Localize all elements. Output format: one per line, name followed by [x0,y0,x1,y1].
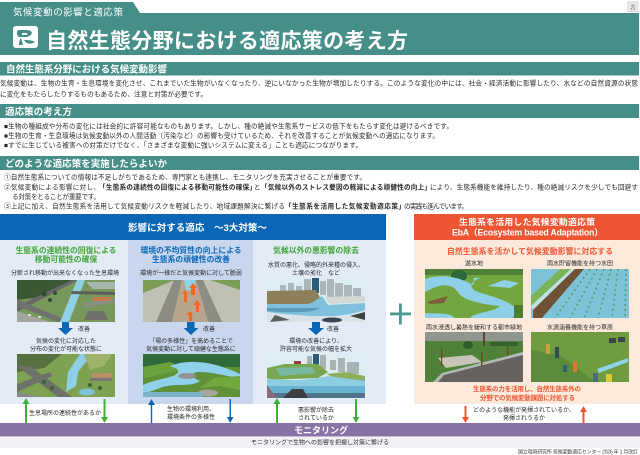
illustration: flood basin [425,260,523,318]
main title: 自然生態分野における適応策の考え方 [46,29,408,53]
arrows and monitoring questions: 環境条件の多様性 [167,413,215,421]
question: environment: 生物の環境利用、 [167,405,215,413]
description before: 分断され移動が出来なくなった生息環境 [11,269,119,277]
question: connectivity: 生息場所の連続性があるか [29,409,101,417]
arrow: blue up [148,399,155,423]
illustration: fragmented land [17,280,115,322]
illustration: flood basin: 遊水地 [465,260,483,268]
illustration: uniform channel [143,280,240,322]
panel header: 生態系を活用した気候変動適応策 [459,216,595,227]
arrow: red up [580,406,587,423]
section heading: どのような適応策を実施したらよいか [5,158,167,170]
panel: EbA [414,214,640,404]
text block: what to implement [4,172,638,210]
arrow: green down [352,399,360,423]
section: adaptation approach [0,104,639,118]
arrows and monitoring questions: 発揮されうるか [503,414,545,422]
column heading: 生態系の連続性の回復による [15,245,117,255]
arrow: blue down [227,399,234,423]
arrow: improve: 改善 [78,325,90,333]
description after: 環境の改善により、 [289,337,343,345]
text block: what to implement: と [254,184,261,192]
section heading: 適応策の考え方 [5,106,72,118]
illustration: rice paddy: 雨水貯留機能を持つ水田 [547,260,613,268]
column: other stressors [254,240,386,404]
description after: 気候の変化に対応した [36,337,96,345]
panel: EbA: 分野での気候変動課題に対処する [480,393,575,402]
column: connectivity: 移動可能性の確保 [35,254,97,264]
arrow: green down [101,399,108,423]
arrows and monitoring questions: されているか [298,415,334,422]
text block: what to implement: 「気候以外のストレス要因の軽減による頑健性の向上」 [261,182,431,192]
text block: what to implement: ③上記に加え、自然生態系を活用して気候変動リスクを軽減したり、地域課題解決に繋げる [4,202,285,210]
text block: climate impacts: に変化をもたらしたりするものもあるため、注意と対策が必要です。 [0,90,207,98]
illustration: grassland: 水源涵養機能を持つ草原 [547,324,613,332]
header band [0,2,639,55]
text block: climate impacts [0,78,638,98]
arrow: green up [22,398,30,423]
illustration: rice paddy [531,260,629,318]
arrow: red down [462,406,469,423]
column: heterogeneity: 気候変動に対して頑健な生態系に [146,345,236,353]
panel footer text: 生態系の力を活用し、自然生態系外の [473,384,582,393]
arrow: improve [308,322,339,335]
tag: front page mark: 表 [630,2,637,12]
monitoring description [0,437,640,448]
illustration: urban green [425,324,523,382]
text block: what to implement: の実践も進んでいます。 [404,202,468,210]
icon: nature logo [13,26,38,48]
panel header [414,214,640,240]
column: connectivity: 分布の変化が可能な状態に [30,345,102,353]
text block: what to implement: る対策をとることが重要です。 [12,192,100,201]
illustration: restored connectivity [17,354,115,397]
section heading: 自然生態系分野における気候変動影響 [6,64,167,76]
illustration: urban green: 雨水浸透し暑熱を緩和する都市緑地 [426,324,522,332]
section: climate impacts [0,62,639,76]
text block: adaptation approach: ■生物の生育・生息環境は気候変動以外の人間活動（汚染など）の影響も受けているため、それを改善することが気候変動への適応になります。 [4,131,439,140]
panel subheading: 自然生態系を活かして気候変動影響に対応する [447,246,613,256]
description after: 「場の多様性」を高めることで [149,337,233,345]
column: heterogeneity [128,240,254,404]
text block: adaptation approach: ■生物の種組成や分布の変化には社会的に許容可能なものもあります。しかし、種の絶滅や生態系サービスの低下をもたらす変化は避けるべきです。 [4,122,453,130]
text block: what to implement: ②気候変動による影響に対し、 [4,182,100,192]
column heading: 環境の不均質性の向上による [140,245,242,255]
arrow: improve [58,322,90,335]
text block: what to implement: 「生態系を活用した気候変動適応策」 [285,202,405,210]
text block: what to implement: 「生態系の連続性の回復による移動可能性の確保」 [99,182,256,192]
column heading: 気候以外の悪影響の除去 [273,245,359,255]
column: other stressors: 土壌の劣化 など [292,269,340,277]
illustration: restored waterfront [267,353,365,398]
panel header [0,214,386,240]
monitoring band [0,423,640,436]
text block: adaptation approach [4,122,453,150]
description before: 環境が一様だと気候変動に対して脆弱 [140,269,242,277]
text block: what to implement: により、生態系機能を維持したり、種の絶滅リスクを少しでも回避す [430,182,638,192]
header category label: 気候変動の影響と適応策 [13,6,123,18]
text block: climate impacts: 気候変動は、生物の生育・生息環境を変化させ、これまでいた生物がいなくなったり、逆にいなかった生物が増加したりする。このような変化の中には、社会・経済活動に影響したり、水などの自然資源の状態 [0,78,638,88]
arrows and monitoring questions [22,398,587,423]
arrow: improve: 改善 [203,325,215,333]
panel header: 影響に対する適応 ～3大対策～ [128,222,267,234]
column: heterogeneity: 生態系の頑健性の改善 [152,254,230,264]
panel header: EbA（Ecosystem based Adaptation） [452,228,603,238]
monitoring band: モニタリング [294,424,348,436]
illustration: diverse river [143,354,240,397]
description before: 水質の悪化、侵略的外来種の侵入、 [268,261,364,269]
illustration: polluted waterfront [267,278,365,322]
arrow: improve [184,322,215,335]
text block: adaptation approach: ■すでに生じている被害への対策だけでなく、「さまざまな変動に強いシステムに変える」ことも適応につながります。 [4,140,362,150]
column: connectivity [0,240,128,404]
illustration: grassland [531,324,629,382]
plus sign [390,304,411,324]
panel: three major measures [0,214,386,404]
question: function: どのような機能が発揮されているか、 [473,406,575,414]
column: other stressors: 許容可能な気候の幅を拡大 [280,345,352,353]
section: what to implement [0,156,639,170]
arrow: green up [274,398,280,423]
tag: front page mark [628,2,638,12]
monitoring description: モニタリングで生物への影響を把握し対策に繋げる [251,438,389,446]
question: stress removed: 悪影響が除去 [298,406,334,414]
text block: what to implement: ①自然生態系についての情報は不足しがちであるため、専門家とも連携し、モニタリングを充実させることが重要です。 [4,172,366,182]
arrow: improve: 改善 [327,325,339,333]
